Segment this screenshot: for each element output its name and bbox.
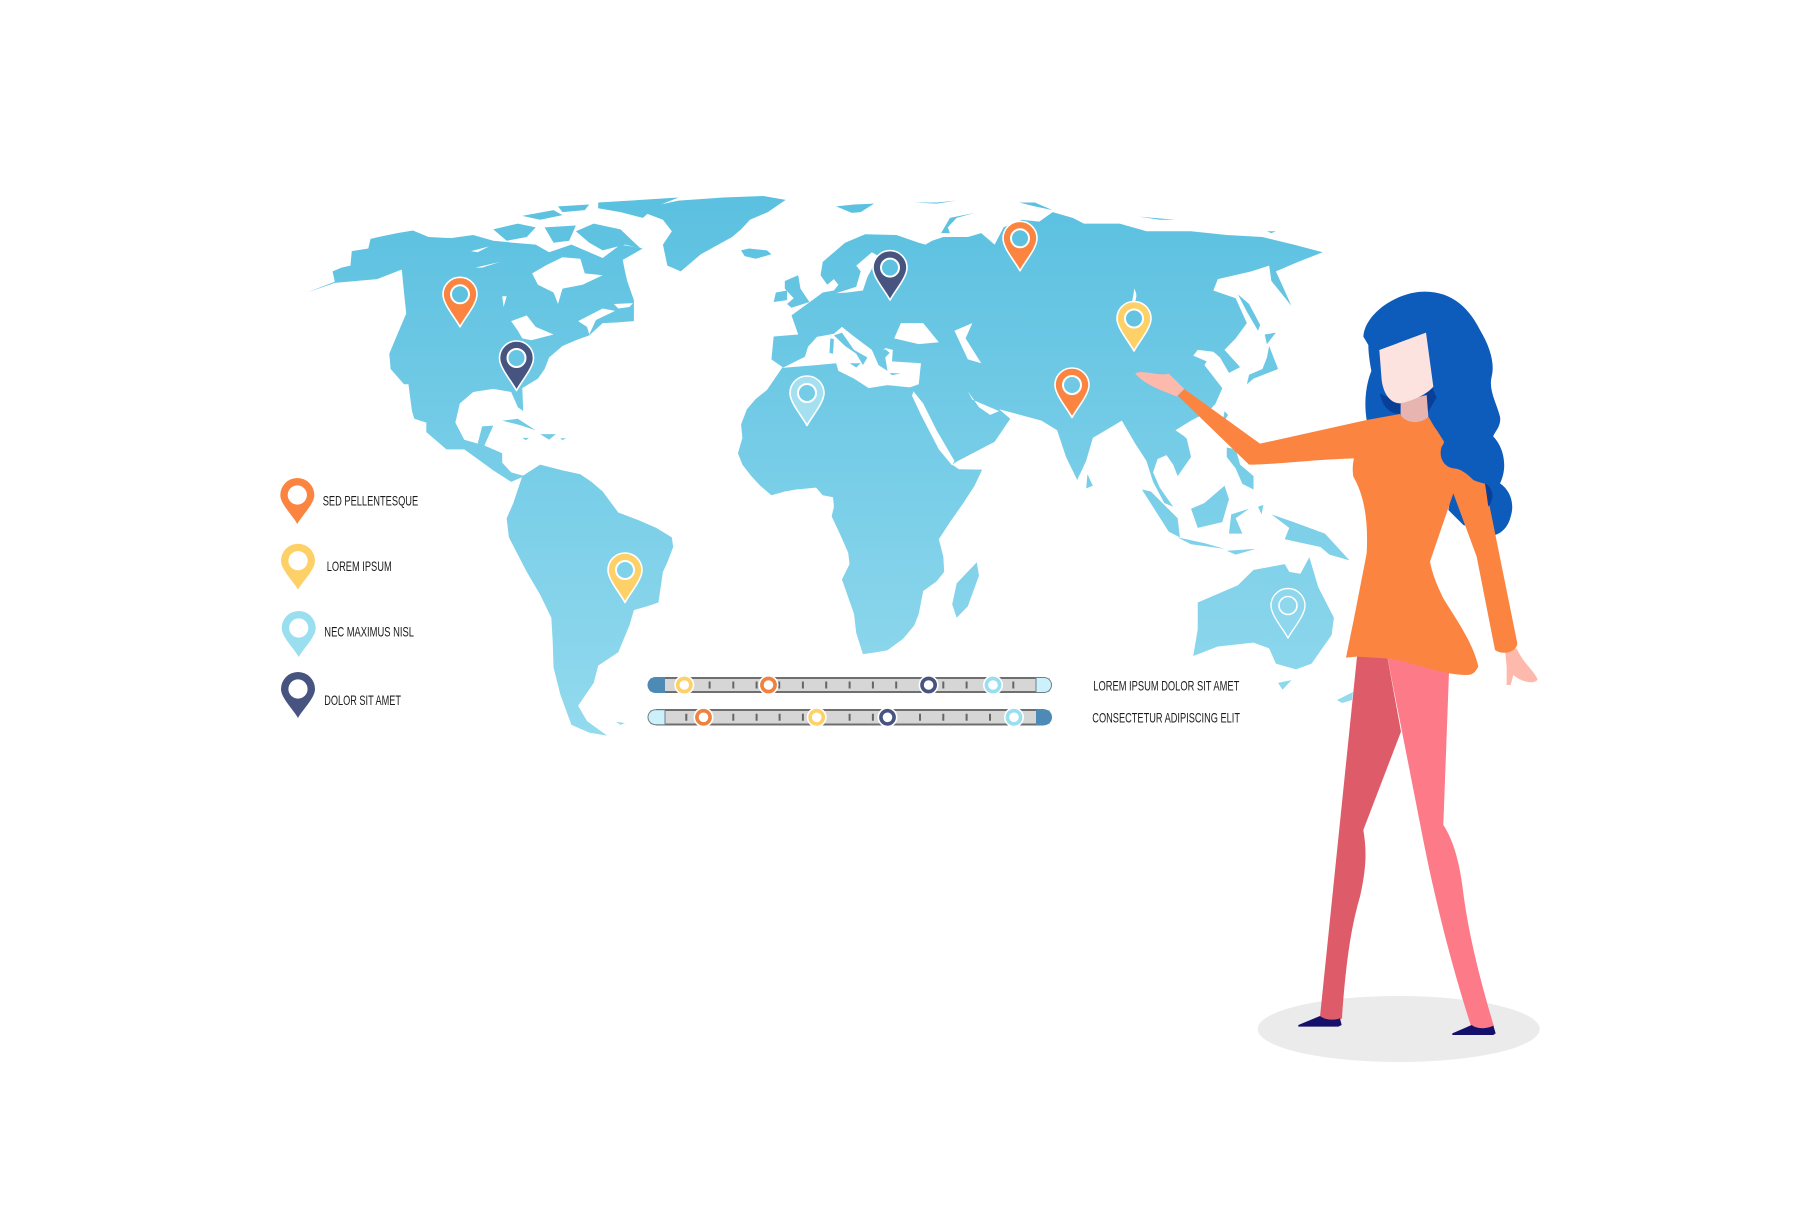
- pin: orange north america: [443, 277, 477, 327]
- neck: [1401, 395, 1428, 422]
- pin: navy united states: [500, 341, 534, 390]
- hair shadows: [1380, 387, 1492, 507]
- slider one ticks: [710, 682, 1013, 688]
- legend: [280, 478, 418, 718]
- left hand: [1135, 372, 1184, 397]
- legend item: dolor sit amet: DOLOR SIT AMET: [324, 692, 401, 708]
- legs and shoes: [1298, 653, 1496, 1035]
- slider one label: LOREM IPSUM DOLOR SIT AMET: [1093, 678, 1240, 694]
- legend item: sed pellentesque: [280, 478, 418, 524]
- slider two light cap: [648, 710, 665, 725]
- slider one dark cap: [648, 677, 665, 693]
- upper body: [1178, 292, 1538, 685]
- slider one track: [650, 678, 1050, 692]
- pin: yellow brazil: [608, 553, 642, 602]
- slider two ticks: [686, 714, 990, 721]
- slider two track: [650, 710, 1050, 724]
- map pins: [443, 221, 1305, 638]
- greenland: [643, 196, 786, 271]
- arctic islands: [493, 198, 679, 250]
- hair front: [1363, 292, 1504, 484]
- slider two label: CONSECTETUR ADIPISCING ELIT: [1092, 709, 1240, 725]
- face: [1379, 333, 1433, 403]
- south america: [507, 465, 673, 736]
- legend item: sed pellentesque: SED PELLENTESQUE: [323, 493, 418, 509]
- new zealand: [1337, 692, 1353, 703]
- japan and sakhalin: [1238, 294, 1278, 384]
- legend item: lorem ipsum: [281, 544, 392, 590]
- pin: orange russia: [1003, 221, 1037, 271]
- back leg: [1320, 653, 1401, 1021]
- southeast asian islands: [1142, 411, 1350, 560]
- australia: [1193, 557, 1334, 669]
- dress and arms: [1178, 389, 1517, 675]
- slider one markers: [674, 675, 1003, 695]
- legend item: nec maximus nisl: NEC MAXIMUS NISL: [324, 624, 414, 640]
- mediterranean peninsulas and islands: [829, 333, 901, 375]
- eurasia and africa: [738, 212, 1323, 654]
- falkland islands: [616, 722, 625, 725]
- pin: navy finland: [873, 251, 907, 300]
- legend item: dolor sit amet: [281, 672, 401, 718]
- woman figure: [1135, 292, 1538, 1035]
- legend item: lorem ipsum: LOREM IPSUM: [327, 558, 392, 574]
- eurasia africa and oceania: [738, 201, 1350, 690]
- front shoe: [1452, 1025, 1496, 1035]
- slider two: [648, 707, 1240, 727]
- front leg: [1387, 653, 1494, 1029]
- iceland: [741, 248, 771, 259]
- sri lanka: [1086, 474, 1093, 488]
- slider two dark cap: [1036, 709, 1052, 725]
- back shoe: [1298, 1016, 1342, 1027]
- slider one light cap: [1036, 678, 1052, 692]
- pin: orange india: [1055, 368, 1089, 418]
- world map: [307, 196, 1353, 736]
- madagascar: [952, 562, 979, 618]
- americas and greenland: [307, 196, 786, 736]
- hair behind body: [1365, 367, 1512, 535]
- tasmania: [1278, 680, 1291, 690]
- pin: yellow china: [1117, 288, 1151, 351]
- slider one: [648, 675, 1240, 695]
- slider two markers: [694, 707, 1024, 727]
- pin: pale africa: [790, 376, 824, 426]
- right hand: [1505, 648, 1538, 685]
- legend item: nec maximus nisl: [282, 611, 414, 657]
- north american inland water: [404, 247, 633, 419]
- ground shadow: [1258, 996, 1540, 1062]
- arctic archipelagos: [836, 201, 1276, 233]
- british isles: [774, 275, 809, 308]
- inland seas: [783, 252, 1191, 465]
- pin: outline australia: [1271, 588, 1305, 638]
- caribbean islands: [502, 419, 566, 440]
- north america: [307, 230, 643, 482]
